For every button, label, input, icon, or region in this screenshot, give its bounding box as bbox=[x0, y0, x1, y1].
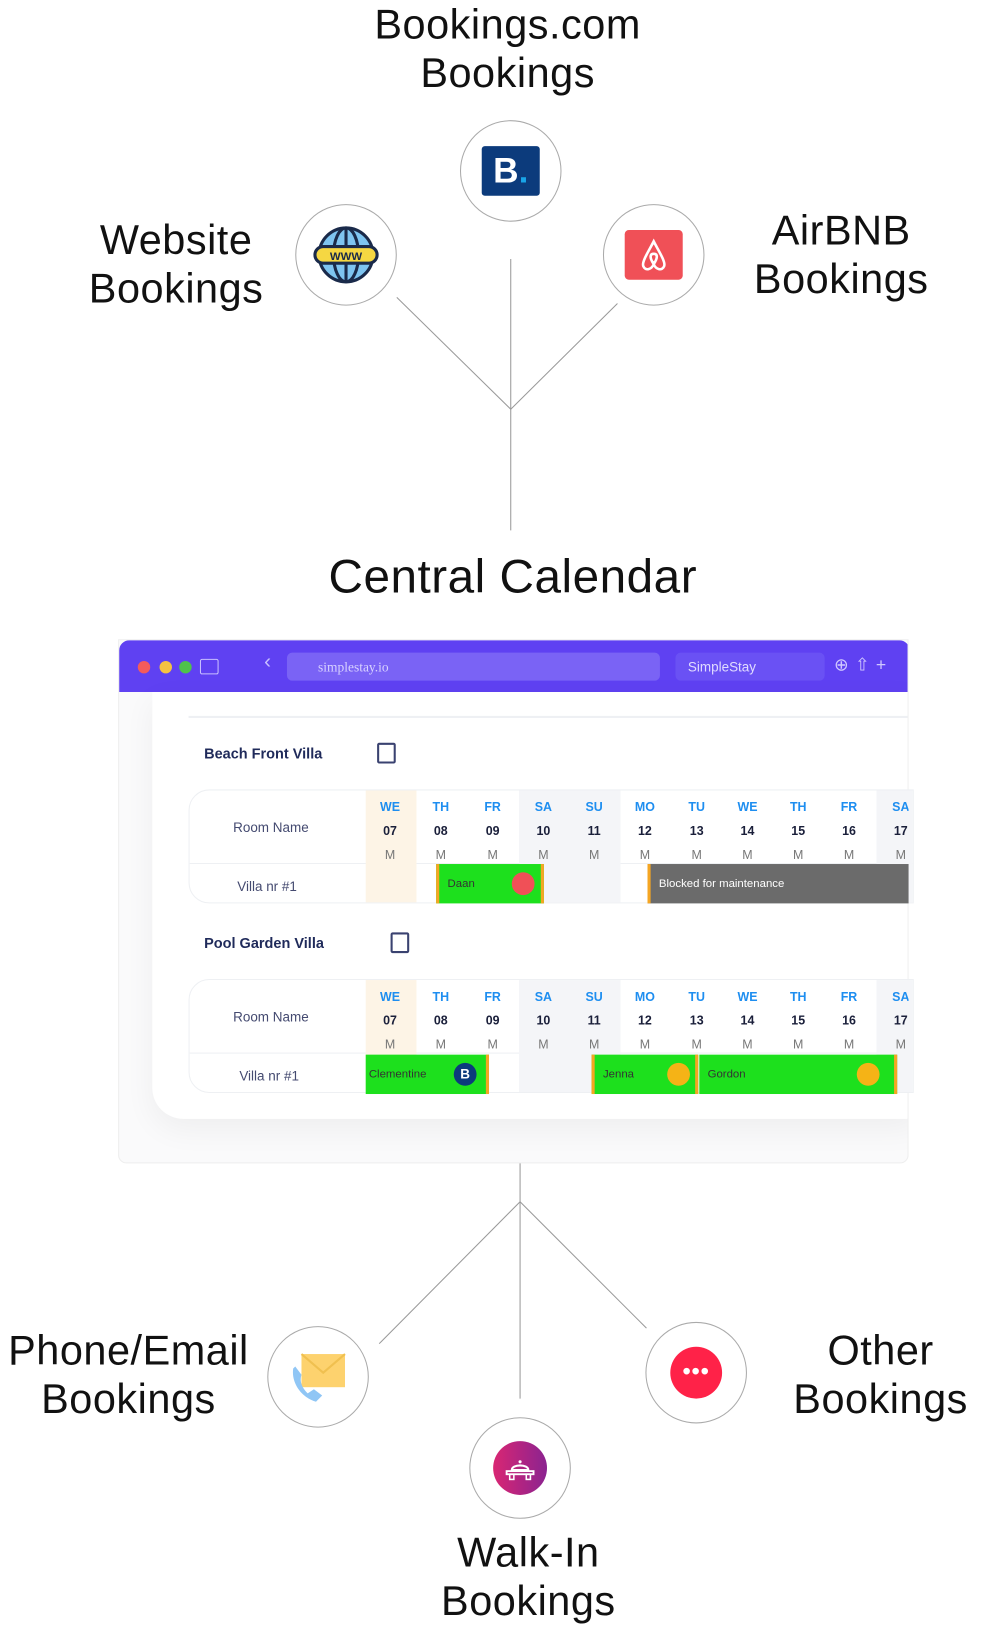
booking: Gordon: Gordon bbox=[708, 1068, 746, 1081]
icon: phone/email bbox=[267, 1326, 369, 1428]
day headers: M bbox=[742, 847, 753, 862]
day headers: FR bbox=[484, 800, 501, 814]
label: Phone/Email Bookings bbox=[8, 1328, 249, 1422]
day headers: M bbox=[589, 1037, 599, 1052]
day headers: 13 bbox=[690, 1013, 704, 1028]
title: Website Bookings: Website bbox=[100, 218, 252, 263]
day headers: M bbox=[793, 847, 803, 862]
day headers: 16 bbox=[842, 1013, 856, 1028]
day headers: 12 bbox=[638, 824, 652, 838]
day headers: FR bbox=[484, 989, 501, 1004]
booking: Daan bbox=[436, 864, 544, 903]
day headers: M bbox=[844, 1037, 854, 1052]
booking: Blocked bbox=[648, 864, 917, 903]
icon: other: ••• bbox=[683, 1358, 710, 1384]
label: Phone/Email Bookings: Bookings bbox=[41, 1377, 216, 1422]
day headers: M bbox=[692, 1037, 702, 1052]
browser toolbar: ‹ bbox=[264, 651, 271, 673]
day headers: 14 bbox=[741, 1013, 754, 1028]
title: AirBNB Bookings: Bookings bbox=[754, 257, 929, 303]
table 1: Villa nr #1 bbox=[237, 879, 297, 894]
day headers: WE bbox=[737, 800, 757, 814]
day headers: SU bbox=[586, 989, 603, 1004]
day headers: 11 bbox=[588, 824, 601, 838]
label: Other Bookings: Other bbox=[827, 1328, 934, 1374]
table 2: Room Name bbox=[233, 1009, 309, 1025]
table 1 bbox=[189, 789, 914, 903]
day headers: M bbox=[589, 847, 599, 862]
panel: calendar screenshot bbox=[118, 639, 909, 1163]
day headers: M bbox=[692, 847, 702, 862]
booking: Clementine bbox=[366, 1055, 489, 1094]
day headers: 17 bbox=[894, 824, 908, 838]
day headers: TH bbox=[790, 989, 807, 1004]
day headers: M bbox=[538, 847, 549, 862]
browser toolbar bbox=[119, 640, 910, 692]
day headers: TU bbox=[688, 800, 705, 814]
icon: walk-in bell bbox=[469, 1417, 571, 1519]
label: Other Bookings: Bookings bbox=[793, 1377, 968, 1422]
day headers: M bbox=[436, 847, 446, 862]
day headers: 14 bbox=[741, 824, 754, 838]
url bar bbox=[287, 653, 660, 681]
table 1: Room Name bbox=[233, 819, 309, 835]
day headers: M bbox=[487, 1037, 498, 1052]
day headers: M bbox=[487, 847, 498, 862]
day headers: M bbox=[793, 1037, 803, 1052]
day headers: M bbox=[436, 1037, 446, 1052]
browser toolbar: ⊕⇧+ bbox=[834, 655, 892, 674]
day headers: FR bbox=[841, 800, 857, 814]
title: Bookings.com Bookings bbox=[374, 2, 641, 96]
day headers: M bbox=[640, 847, 650, 862]
icon: booking.com bbox=[460, 120, 562, 222]
day headers: 16 bbox=[842, 824, 856, 838]
day headers: 13 bbox=[690, 824, 704, 838]
icon: airbnb bbox=[603, 204, 704, 306]
day headers: 17 bbox=[894, 1013, 908, 1028]
table 2: Villa nr #1 bbox=[239, 1068, 299, 1084]
calendar card bbox=[152, 692, 919, 1119]
table 2 bbox=[189, 979, 914, 1093]
url bar: simplestay.io bbox=[318, 659, 389, 674]
day headers: M bbox=[896, 1037, 906, 1052]
label: Phone/Email Bookings: Phone/Email bbox=[8, 1328, 249, 1374]
day headers: WE bbox=[380, 800, 400, 814]
booking: Clementine: B bbox=[460, 1066, 470, 1082]
heading: Central Calendar: Central Calendar bbox=[329, 549, 697, 603]
day headers: MO bbox=[635, 989, 655, 1004]
day headers: TH bbox=[433, 800, 449, 814]
day headers: FR bbox=[841, 989, 857, 1004]
icon: booking.com: B. bbox=[493, 151, 528, 191]
day headers: 10 bbox=[536, 1013, 550, 1028]
label: Walk-In Bookings: Walk-In bbox=[457, 1530, 600, 1576]
day headers: M bbox=[385, 1037, 395, 1052]
label: Walk-In Bookings: Bookings bbox=[441, 1579, 616, 1624]
label: Other Bookings bbox=[793, 1328, 968, 1422]
title: AirBNB Bookings bbox=[754, 208, 929, 303]
booking: Clementine: Clementine bbox=[369, 1068, 426, 1081]
day headers: 07 bbox=[383, 824, 397, 838]
title: Bookings.com Bookings: Bookings bbox=[420, 51, 595, 96]
day headers: 09 bbox=[486, 824, 500, 838]
day headers: TU bbox=[688, 989, 705, 1004]
label: Walk-In Bookings bbox=[441, 1530, 616, 1624]
icon: www globe: WWW bbox=[330, 251, 362, 263]
day headers: TH bbox=[790, 800, 807, 814]
day headers: WE bbox=[737, 989, 757, 1004]
day headers: M bbox=[742, 1037, 753, 1052]
day headers: 07 bbox=[383, 1013, 397, 1028]
day headers: WE bbox=[380, 989, 400, 1004]
day headers: M bbox=[538, 1037, 549, 1052]
title: Bookings.com Bookings: Bookings.com bbox=[374, 2, 641, 48]
section: Beach Front Villa: Beach Front Villa bbox=[204, 745, 322, 761]
booking: Jenna: Jenna bbox=[603, 1068, 634, 1081]
day headers: MO bbox=[635, 800, 655, 814]
icon: www globe bbox=[295, 204, 397, 306]
title: AirBNB Bookings: AirBNB bbox=[772, 208, 911, 254]
title: Website Bookings bbox=[89, 218, 263, 312]
day headers: 15 bbox=[791, 1013, 805, 1028]
day headers: M bbox=[640, 1037, 650, 1052]
booking: Jenna bbox=[592, 1055, 698, 1094]
day headers: SA bbox=[535, 989, 552, 1004]
day headers: M bbox=[896, 847, 906, 862]
day headers: SA bbox=[535, 800, 552, 814]
day headers: 09 bbox=[486, 1013, 500, 1028]
day headers: 08 bbox=[434, 824, 448, 838]
day headers: 10 bbox=[536, 824, 550, 838]
day headers: 15 bbox=[791, 824, 805, 838]
day headers: TH bbox=[433, 989, 449, 1004]
day headers bbox=[366, 800, 909, 1094]
section: Pool Garden Villa: Pool Garden Villa bbox=[204, 934, 324, 951]
browser toolbar: SimpleStay bbox=[688, 659, 756, 674]
day headers: 11 bbox=[588, 1013, 601, 1028]
booking: Gordon bbox=[699, 1055, 897, 1094]
day headers: SU bbox=[586, 800, 603, 814]
booking: Daan: Daan bbox=[448, 877, 475, 890]
day headers: 08 bbox=[434, 1013, 448, 1028]
day headers: M bbox=[844, 847, 854, 862]
title: Website Bookings: Bookings bbox=[89, 266, 263, 312]
icon: other bbox=[645, 1322, 747, 1423]
booking: Blocked: Blocked for maintenance bbox=[659, 877, 784, 890]
day headers: 12 bbox=[638, 1013, 652, 1028]
day headers: M bbox=[385, 847, 395, 862]
